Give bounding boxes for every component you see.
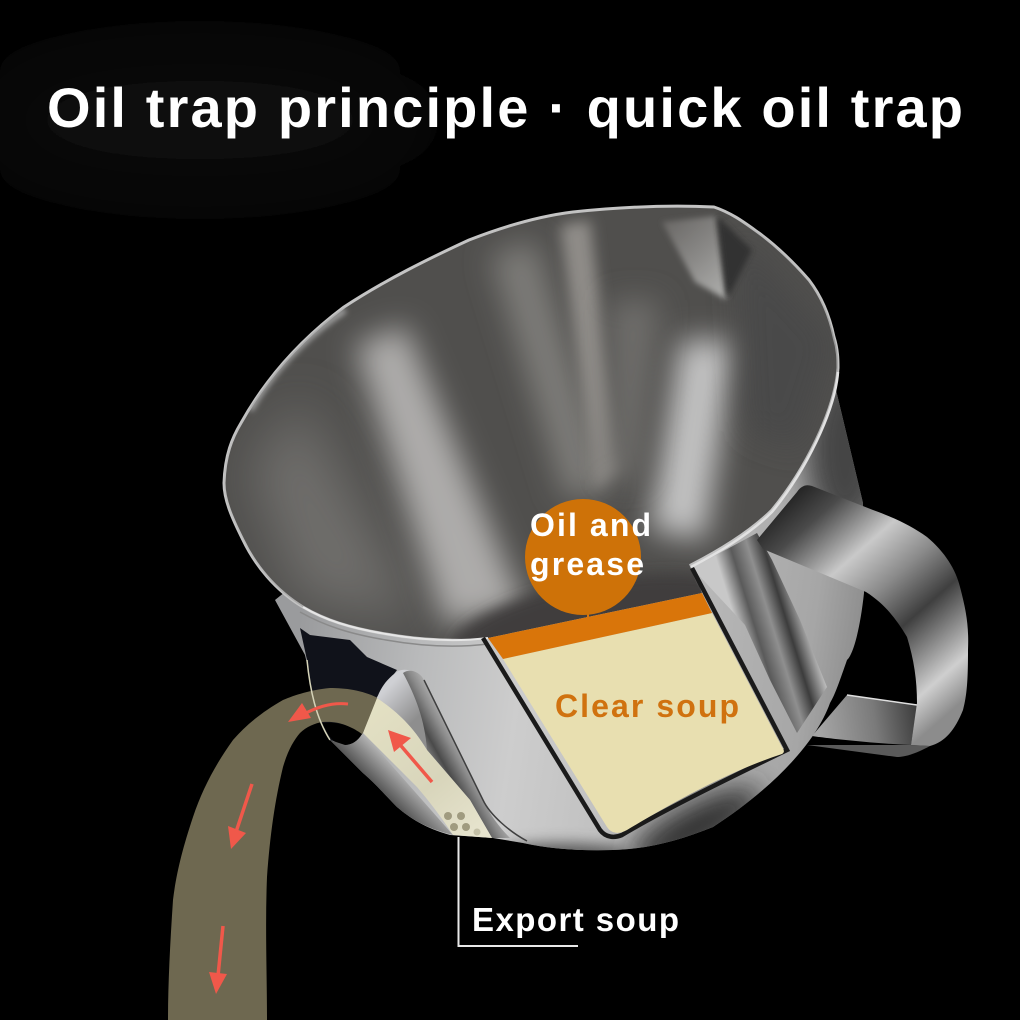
oil and grease label (530, 507, 651, 582)
oil callout circle (525, 499, 641, 615)
oil and grease label: grease (530, 546, 644, 582)
interior reflections (250, 216, 835, 695)
spout gap (322, 723, 362, 745)
arrow: up channel (388, 730, 432, 782)
spout upper metal (377, 670, 440, 765)
drain holes (444, 812, 480, 836)
clear soup panel (503, 613, 784, 833)
soup stream (168, 688, 378, 1020)
soup window edge (483, 568, 787, 837)
body shading (490, 370, 885, 884)
pot illustration (168, 206, 968, 1020)
spout ridge (403, 671, 510, 838)
clear soup label: Clear soup (555, 688, 739, 724)
handle lower band (807, 695, 930, 757)
arrow: stream lower (209, 926, 227, 994)
background glow (0, 50, 430, 190)
oil and grease label: Oil and (530, 507, 651, 543)
pot interior (224, 206, 838, 695)
shiny band beside handle (692, 533, 827, 733)
pot body (275, 390, 864, 850)
spout lip (307, 660, 330, 740)
spout opening (300, 628, 397, 745)
spout lower metal (330, 733, 453, 835)
rim outer line (300, 612, 488, 646)
arrow: over lip (288, 703, 348, 722)
title: Oil trap principle · quick oil trap (47, 76, 963, 139)
soup channel (363, 698, 492, 838)
oil layer (488, 593, 712, 659)
export soup leader line (458, 837, 578, 946)
oil connector line (587, 600, 589, 618)
rim highlight (303, 607, 488, 640)
right rim bright line (691, 372, 838, 567)
spout ridge line (424, 680, 527, 841)
handle upper band (757, 485, 968, 746)
arrow: stream upper (228, 784, 252, 849)
export soup label: Export soup (472, 901, 679, 938)
